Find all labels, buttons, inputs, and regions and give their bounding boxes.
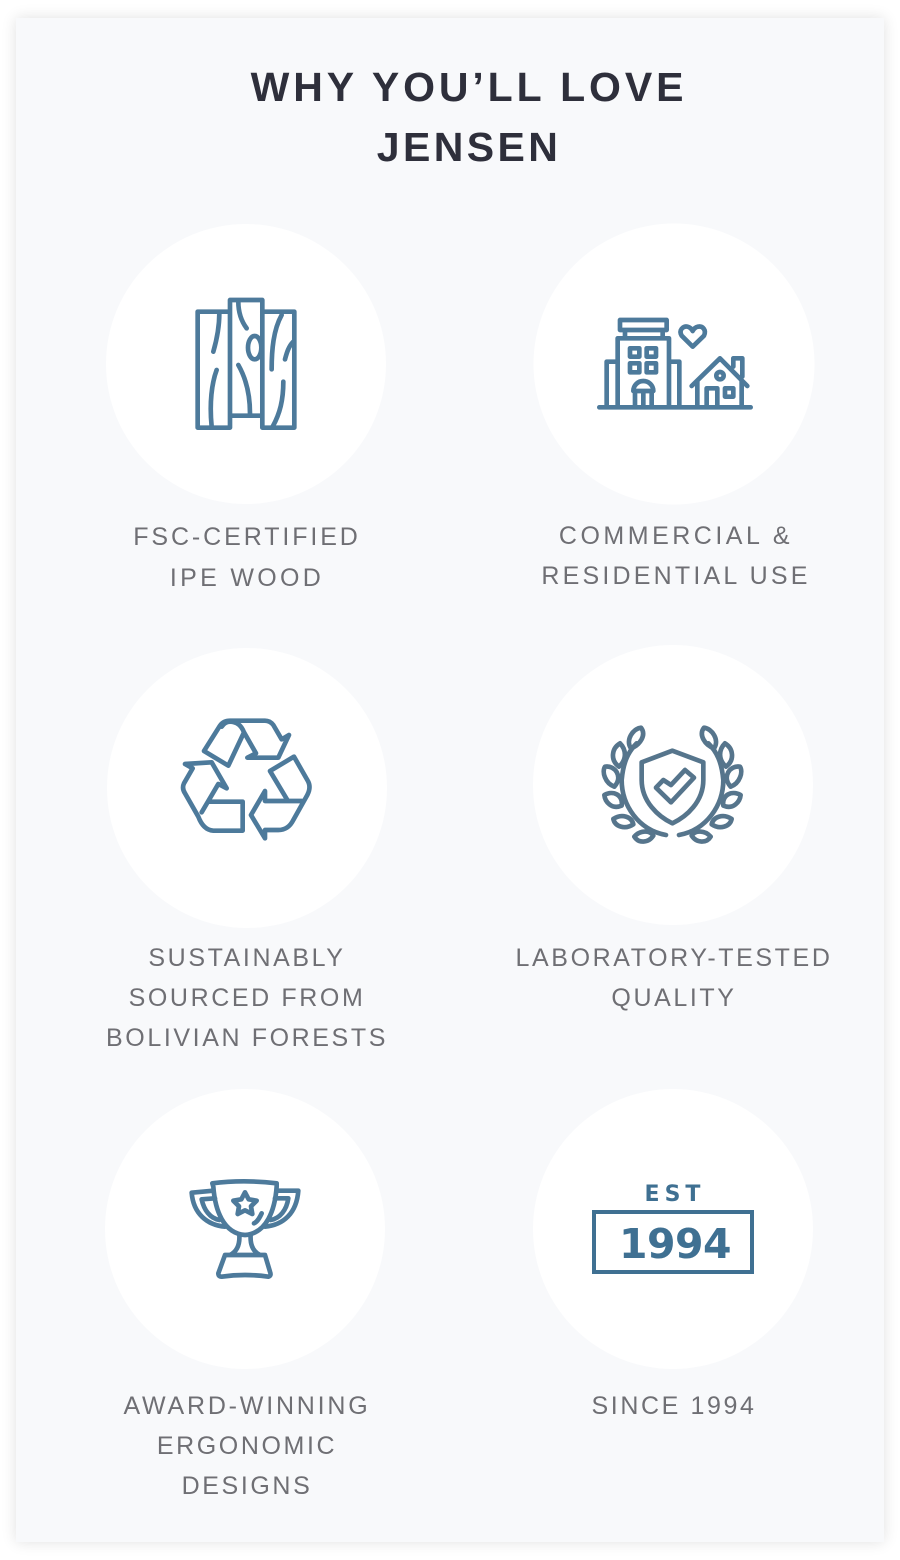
icon: wood planks (198, 300, 294, 428)
circle: trophy (105, 1089, 385, 1369)
label: COMMERCIAL & (559, 522, 793, 550)
item: laboratory-tested quality (516, 645, 832, 1012)
label: AWARD-WINNING (123, 1392, 371, 1420)
icon: buildings and heart (599, 320, 751, 407)
circle: established (533, 1089, 813, 1369)
item: commercial and residential use (534, 224, 814, 590)
circle: buildings (534, 224, 814, 504)
item: since 1994 (533, 1089, 813, 1420)
label: RESIDENTIAL USE (541, 562, 811, 590)
icon: recycle arrows (183, 721, 309, 838)
item: award-winning designs (105, 1089, 385, 1500)
label: SUSTAINABLY (148, 944, 346, 972)
label (133, 523, 361, 592)
title (251, 64, 687, 170)
label: LABORATORY-TESTED (516, 944, 832, 972)
item: FSC-certified ipe wood (106, 224, 386, 592)
label: ERGONOMIC (157, 1432, 337, 1460)
label (516, 944, 832, 1012)
title: JENSEN (377, 124, 561, 170)
label: DESIGNS (182, 1472, 312, 1500)
label: IPE WOOD (170, 564, 324, 592)
circle: wood (106, 224, 386, 504)
title: WHY YOU’LL LOVE (251, 64, 687, 110)
label (123, 1392, 371, 1500)
item: sustainably sourced (106, 648, 388, 1052)
label (106, 944, 388, 1052)
label: BOLIVIAN FORESTS (106, 1024, 388, 1052)
icon: EST 1994 badge: EST (645, 1182, 705, 1207)
icon: trophy (192, 1181, 298, 1277)
circle: recycle (107, 648, 387, 928)
label (541, 522, 811, 590)
circle: laurel (533, 645, 813, 925)
icon: shield and laurel (604, 728, 741, 842)
label: QUALITY (611, 984, 737, 1012)
label: SOURCED FROM (129, 984, 365, 1012)
label: FSC-CERTIFIED (133, 523, 361, 551)
label: SINCE 1994 (592, 1392, 756, 1420)
icon: EST 1994 badge: 1994 (619, 1220, 731, 1268)
icon: EST 1994 badge (594, 1182, 752, 1272)
